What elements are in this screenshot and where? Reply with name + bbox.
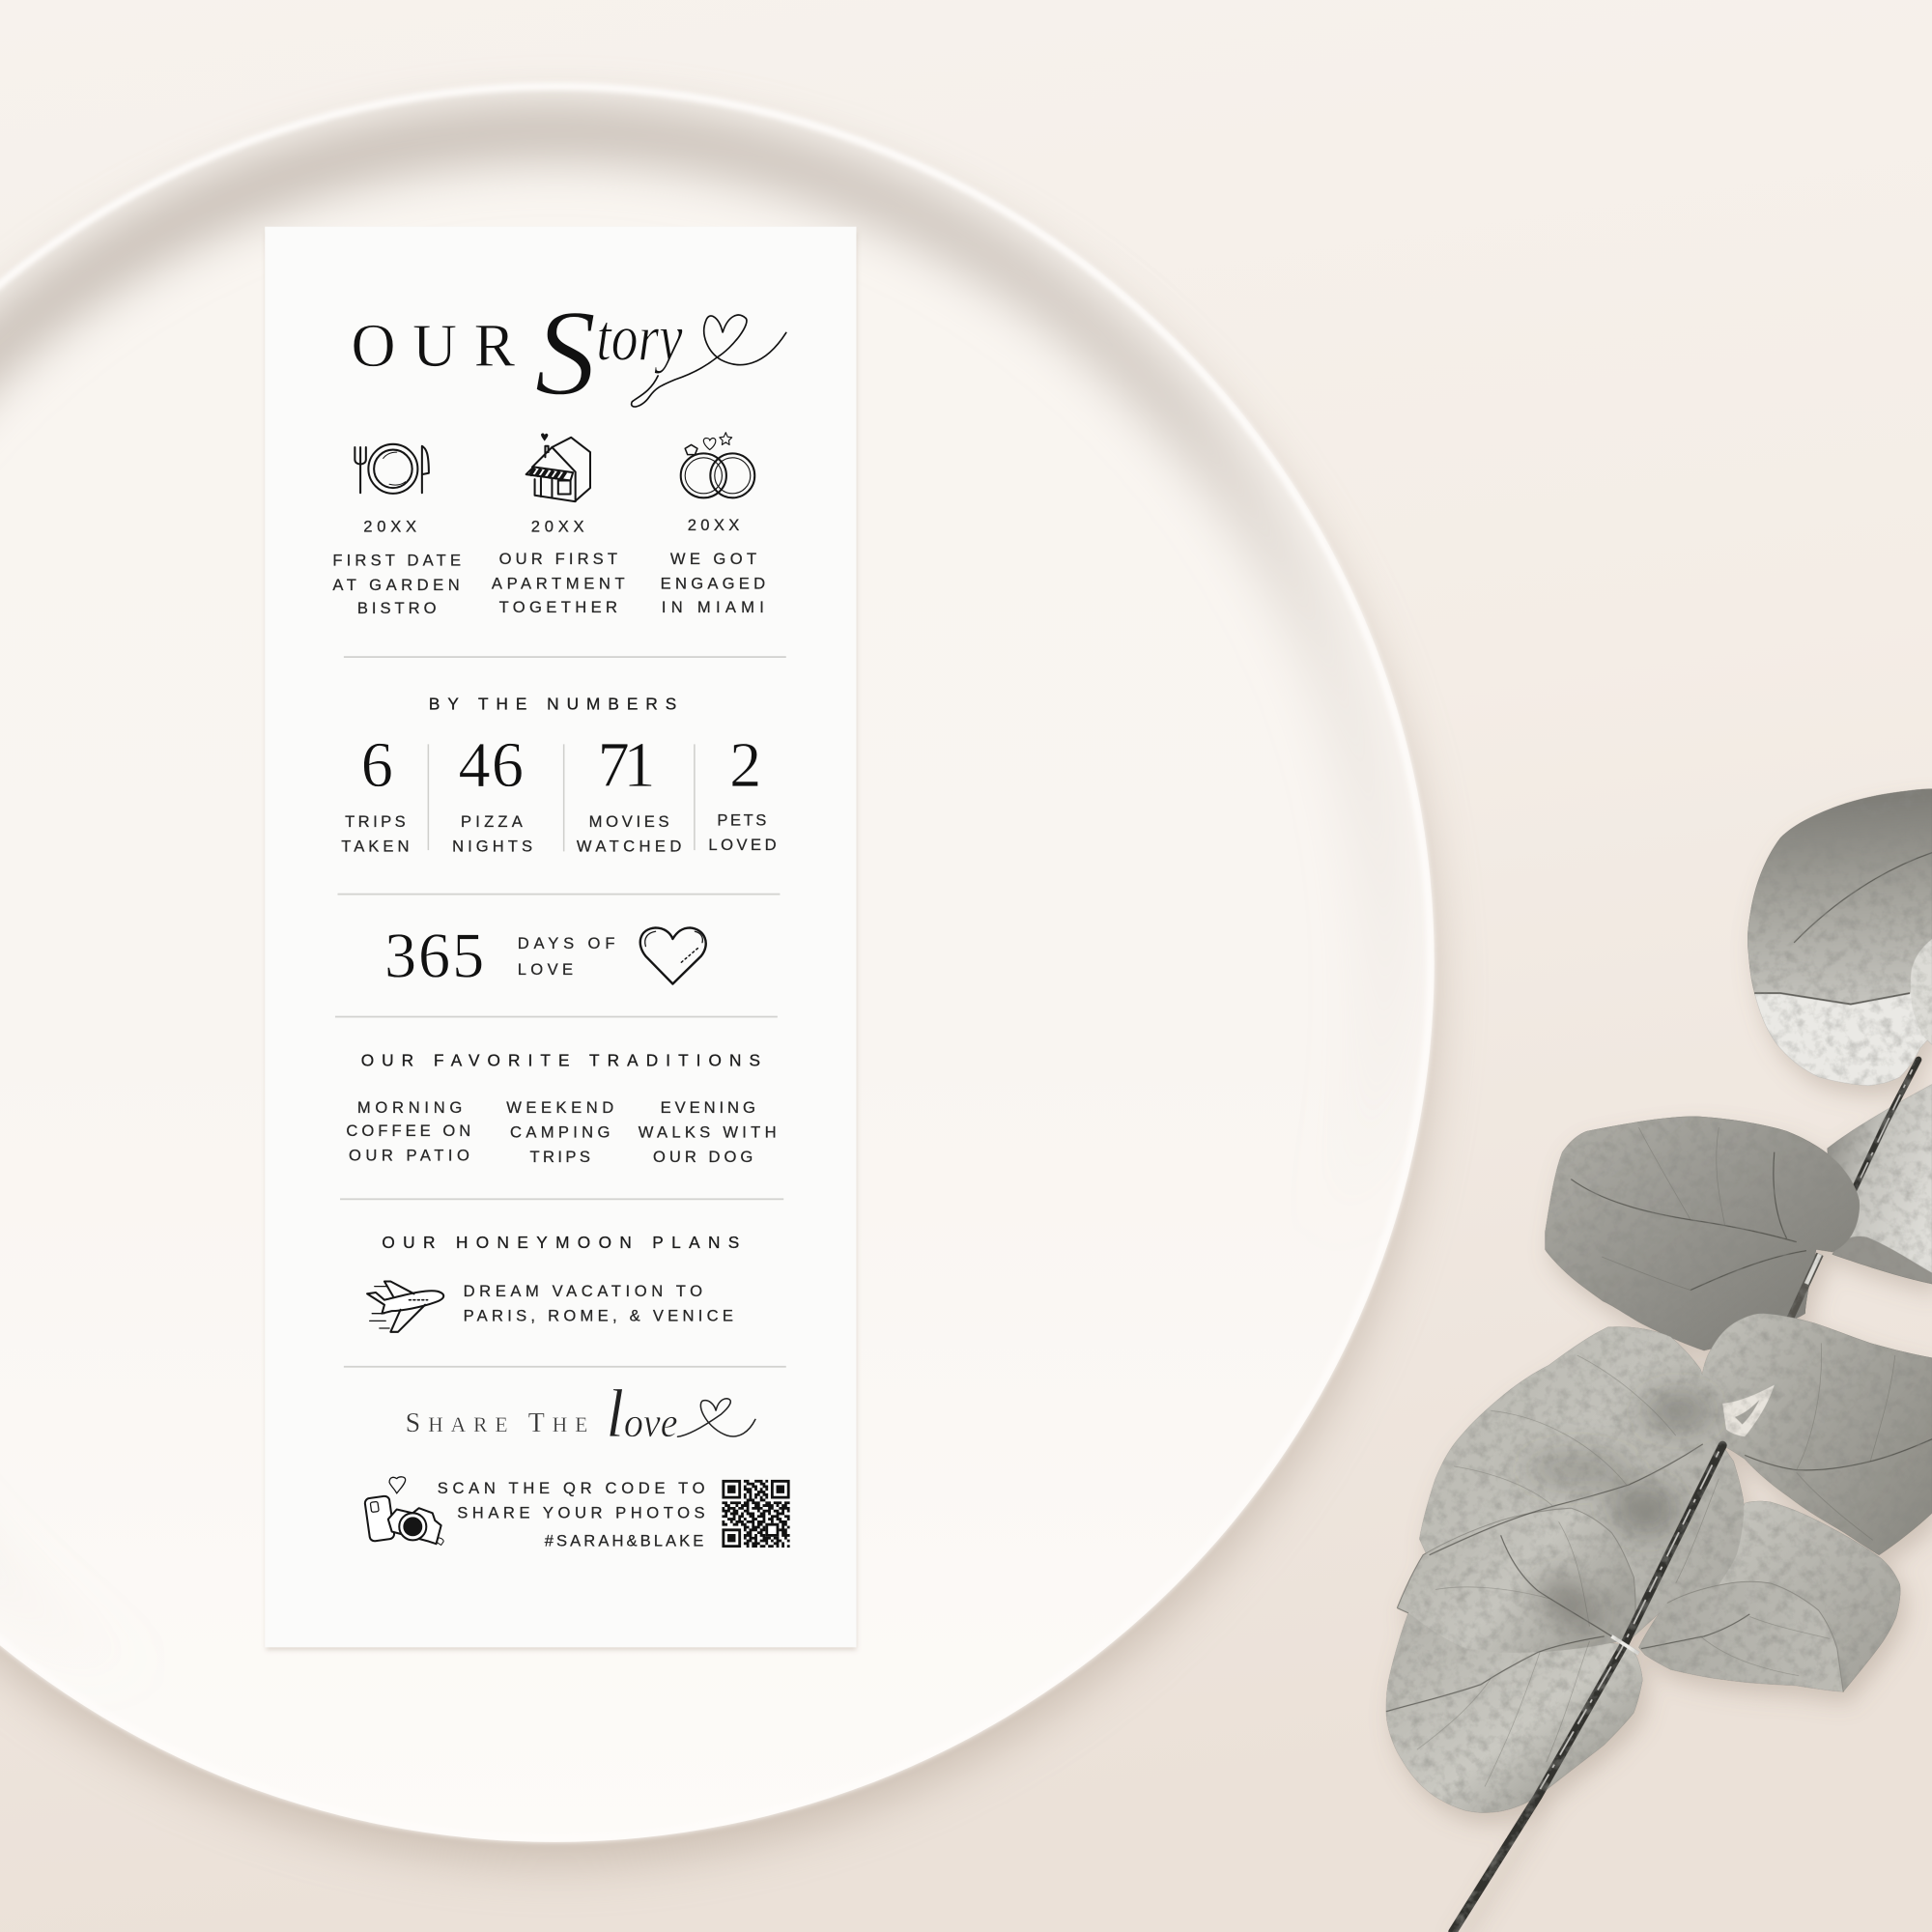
- leaf: back right lower: [1717, 1501, 1900, 1691]
- milestone: engagement: [661, 433, 765, 616]
- tradition: evening walks: EVENING: [661, 1098, 755, 1117]
- upper stem highlight: [1861, 1069, 1913, 1178]
- eucalyptus branch: [1386, 788, 1932, 1932]
- stem highlight: [1540, 1452, 1719, 1789]
- stat: pets loved: PETS: [717, 811, 766, 830]
- card: [265, 227, 856, 1647]
- leaf veins: [1386, 853, 1932, 1712]
- tradition: evening walks: OUR DOG: [653, 1148, 753, 1166]
- leaf: right small pale: [1911, 939, 1932, 1045]
- icon: wedding rings: [681, 433, 754, 497]
- stat: pets loved: 2: [729, 730, 761, 801]
- heading words: S HARE T HE: [406, 1408, 587, 1438]
- stat: pizza nights: PIZZA: [461, 812, 524, 831]
- leaf: bottom left with right lobe: [1386, 1613, 1642, 1812]
- year: 20XX: [688, 516, 739, 534]
- lower node highlight: [1611, 1636, 1638, 1654]
- heading: OUR FAVORITE TRADITIONS: [361, 1050, 760, 1069]
- section: share the love: [364, 1376, 790, 1550]
- upper stem: [1855, 1060, 1918, 1189]
- caption: TOGETHER: [499, 598, 617, 616]
- stat: pizza nights: NIGHTS: [452, 837, 532, 855]
- milestone: first apartment: [492, 433, 625, 616]
- mid stem highlight: [1806, 1254, 1820, 1284]
- leaf: left front: [1397, 1508, 1635, 1653]
- caption: IN MIAMI: [662, 598, 764, 616]
- year: 20XX: [363, 517, 416, 535]
- stat: pets loved: [708, 730, 777, 854]
- leaf: top right pale fold: [1754, 985, 1932, 1086]
- title script word: S: [535, 284, 596, 421]
- tradition: weekend camping: CAMPING: [510, 1122, 610, 1141]
- stat: movies watched: [577, 730, 681, 855]
- stat: pets loved: LOVED: [708, 836, 777, 854]
- script word: love: [607, 1376, 678, 1452]
- leaf edges: [1397, 993, 1910, 1691]
- tradition: evening walks: WALKS WITH: [639, 1122, 777, 1141]
- big number: 365: [384, 921, 484, 991]
- instructions: SHARE YOUR PHOTOS: [457, 1503, 705, 1521]
- fine vein network: [1417, 1127, 1895, 1786]
- description: DREAM VACATION TO: [464, 1282, 702, 1300]
- milestone: first date: [332, 444, 461, 617]
- QR code: [722, 1480, 790, 1548]
- stat: pizza nights: 46: [458, 730, 524, 801]
- node dark core: [1735, 1400, 1759, 1424]
- tradition: weekend camping: TRIPS: [529, 1148, 590, 1166]
- label: LOVE: [518, 960, 573, 979]
- title: [352, 284, 786, 421]
- label: DAYS OF: [518, 934, 614, 952]
- stat: movies watched: MOVIES: [589, 812, 669, 831]
- shade: front leaf dark patch: [1533, 1573, 1602, 1632]
- heading: OUR HONEYMOON PLANS: [382, 1233, 739, 1252]
- shade: upper left leaf dark patches: [1523, 1391, 1716, 1534]
- stat: movies watched: 71: [598, 730, 656, 801]
- leaf: upper right of lower cluster: [1701, 1314, 1932, 1555]
- section: traditions: [346, 1050, 777, 1166]
- section: honeymoon plans: [367, 1233, 739, 1332]
- instructions: SCAN THE QR CODE TO: [438, 1479, 705, 1497]
- stem: [1453, 1445, 1722, 1932]
- mid stem: [1789, 1254, 1820, 1321]
- icon: plate and cutlery: [355, 444, 429, 494]
- icon: phone and camera: [364, 1477, 443, 1545]
- year: 20XX: [531, 517, 584, 535]
- heart flourish: [678, 1399, 755, 1436]
- stat: trips taken: [341, 730, 409, 855]
- stat: pizza nights: [452, 730, 532, 855]
- section: days of love: [384, 921, 706, 991]
- timeline: [332, 433, 765, 617]
- stat: trips taken: TAKEN: [341, 837, 409, 855]
- title word OUR: OUR: [352, 311, 516, 380]
- heading: BY THE NUMBERS: [429, 695, 676, 714]
- description: PARIS, ROME, & VENICE: [464, 1306, 733, 1324]
- caption: AT GARDEN: [332, 576, 460, 594]
- leaf scar at upper node: [1722, 1385, 1775, 1436]
- leaf: petiole grey: [1833, 1236, 1932, 1284]
- caption: APARTMENT: [492, 575, 625, 593]
- stat: trips taken: TRIPS: [345, 812, 406, 831]
- leaf: upper left of lower cluster: [1419, 1326, 1744, 1645]
- stat: movies watched: WATCHED: [577, 837, 681, 855]
- leaf: pale leaf behind stem: [1828, 1084, 1932, 1282]
- title heart flourish: [632, 315, 786, 407]
- tradition: morning coffee: COFFEE ON: [346, 1122, 470, 1140]
- plate: [0, 82, 1435, 1863]
- card shadow: [267, 232, 856, 1650]
- caption: ENGAGED: [661, 575, 765, 593]
- leaf: bottom right front: [1638, 1581, 1843, 1691]
- title script word: tory: [596, 300, 683, 374]
- icon: airplane: [367, 1282, 443, 1332]
- instructions: #SARAH&BLAKE: [545, 1532, 703, 1550]
- caption: BISTRO: [357, 599, 437, 617]
- tradition: weekend camping: WEEKEND: [506, 1098, 613, 1117]
- caption: FIRST DATE: [332, 551, 461, 569]
- leaf: top right upper half: [1747, 788, 1932, 1005]
- card paper: [265, 227, 856, 1647]
- stat: trips taken: 6: [361, 730, 393, 801]
- caption: WE GOT: [670, 550, 756, 568]
- caption: OUR FIRST: [499, 550, 617, 568]
- leaf: middle: [1545, 1117, 1860, 1350]
- icon: heart: [640, 927, 706, 983]
- section: by the numbers: [341, 695, 777, 855]
- tradition: morning coffee: OUR PATIO: [349, 1147, 469, 1165]
- tradition: morning coffee: MORNING: [357, 1098, 462, 1117]
- icon: house with awning: [526, 433, 590, 501]
